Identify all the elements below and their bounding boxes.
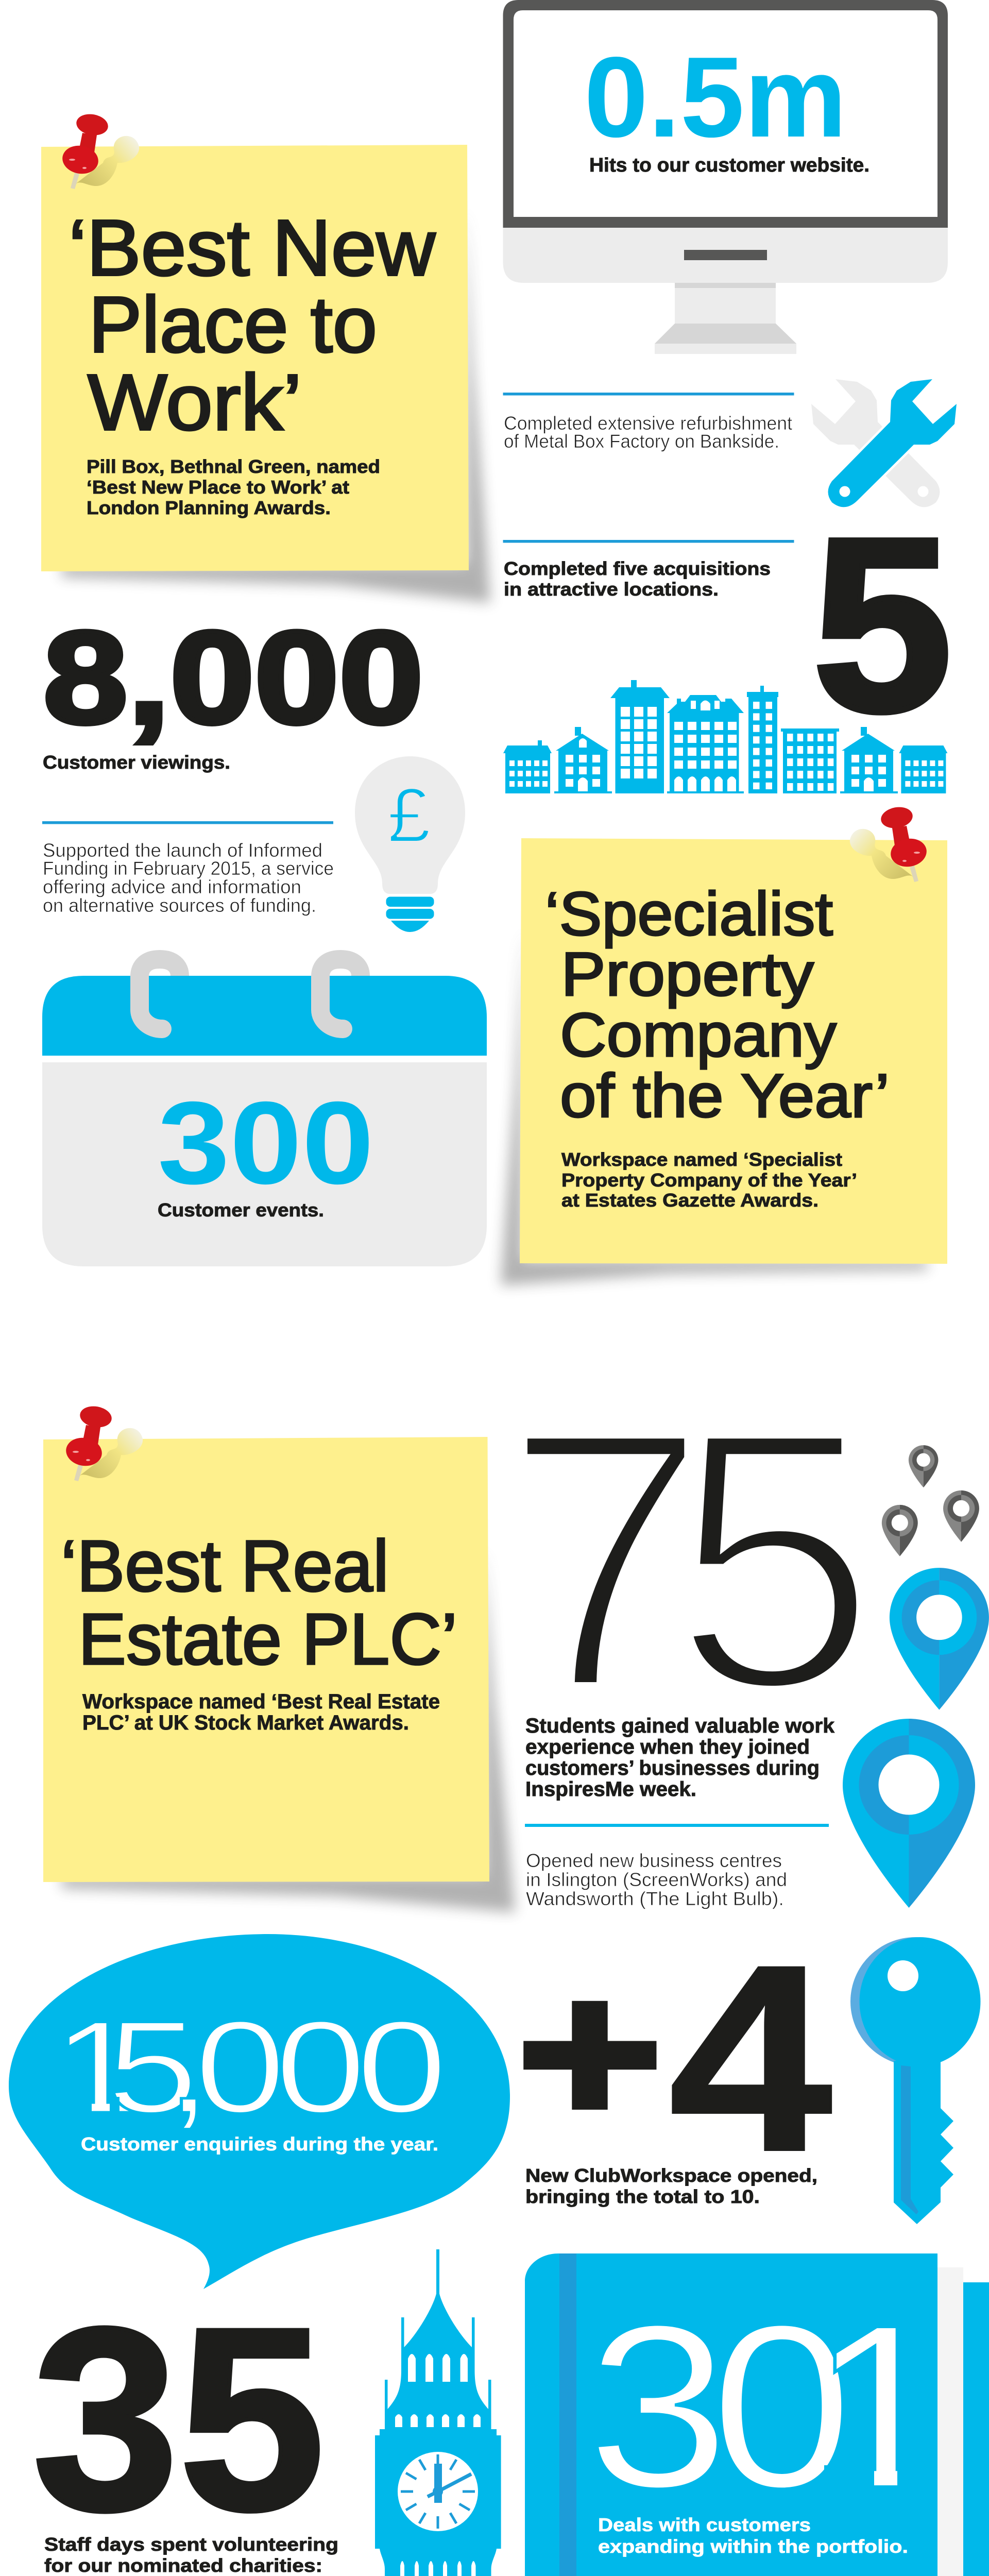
small grey pin left <box>882 1505 918 1556</box>
description: students: experience when they joined <box>525 1736 810 1758</box>
description: students: Students gained valuable work <box>525 1715 835 1737</box>
icon: Big Ben clock tower <box>375 2249 501 2576</box>
description: ClubWorkspace: New ClubWorkspace opened, <box>525 2165 817 2186</box>
label: customer events: Customer events. <box>158 1199 324 1221</box>
text block: acquisitions: in attractive locations. <box>504 579 719 600</box>
panel: sticky note Best Real Estate PLC <box>43 1404 515 1912</box>
monitor stand <box>655 283 796 354</box>
award description: Workspace named ‘Specialist <box>561 1149 842 1170</box>
small grey pin top <box>909 1445 938 1487</box>
building 1 <box>503 740 552 793</box>
stat: +4 ClubWorkspace: + <box>517 1940 662 2165</box>
award description: ‘Best New Place to Work’ at <box>87 477 349 498</box>
calendar body <box>42 1062 487 1266</box>
stat: 8,000 customer viewings: 8,000 <box>43 604 423 751</box>
stat: 35 staff days: 35 <box>32 2274 325 2565</box>
stat: 15,000: 15,000 <box>52 1994 448 2141</box>
icon: crossed wrenches <box>811 379 957 507</box>
icon: key <box>850 1937 981 2224</box>
text block: refurbishment: Completed extensive refurbishment <box>504 413 793 434</box>
heading: Company <box>560 1001 837 1070</box>
description: staff days <box>44 2534 338 2576</box>
description: students: InspiresMe week. <box>525 1778 696 1801</box>
text block: refurbishment <box>503 393 794 452</box>
heading: Work’ <box>88 358 302 447</box>
stat: 0.5m: 0.5m <box>584 33 847 161</box>
award description: Property Company of the Year’ <box>561 1170 857 1191</box>
medium blue pin <box>890 1568 989 1710</box>
sticky note paper <box>41 145 469 571</box>
book spine band <box>559 2253 576 2576</box>
label: deals: Deals with customers <box>598 2514 811 2535</box>
panel: sticky note Best New Place to Work <box>41 112 490 603</box>
award description: Workspace named ‘Best Real Estate <box>82 1690 440 1713</box>
description: students: customers’ businesses during <box>525 1757 820 1780</box>
stat: 75 students: 75 <box>502 1352 878 1768</box>
label: hits: Hits to our customer website. <box>589 155 869 176</box>
panel: speech bubble 15,000 enquiries <box>9 1934 510 2289</box>
calendar ring right <box>320 959 361 1038</box>
award description <box>87 456 380 518</box>
description: ClubWorkspace: bringing the total to 10. <box>525 2186 760 2207</box>
award description: London Planning Awards. <box>87 497 331 518</box>
monitor chin <box>503 222 948 283</box>
clock face <box>398 2452 478 2531</box>
belfry windows <box>395 2354 481 2427</box>
text block: Informed Funding: offering advice and information <box>43 876 301 897</box>
text block: acquisitions: Completed five acquisitions <box>504 558 771 579</box>
label: customer enquiries: Customer enquiries during the year. <box>81 2133 438 2155</box>
building 6 <box>781 728 839 793</box>
label: customer viewings: Customer viewings. <box>43 752 230 773</box>
stat: +4 ClubWorkspace <box>517 1910 834 2207</box>
description: students <box>525 1715 835 1801</box>
award description: PLC’ at UK Stock Market Awards. <box>82 1711 409 1734</box>
description: ClubWorkspace <box>525 2165 817 2207</box>
heading <box>545 879 890 1130</box>
award description <box>561 1149 857 1211</box>
sticky note paper <box>520 838 947 1264</box>
award description: at Estates Gazette Awards. <box>561 1190 819 1211</box>
illustration: row of buildings <box>503 680 947 793</box>
stat: 301: 301 <box>587 2276 953 2536</box>
building 5 <box>747 686 778 793</box>
text block: Informed Funding: Supported the launch of Informed <box>43 840 322 861</box>
sticky note paper <box>43 1437 489 1882</box>
icon: red push pin <box>850 805 929 882</box>
panel: sticky note Specialist Property Company of the Year <box>501 805 947 1285</box>
text block: Informed Funding: on alternative sources of funding. <box>43 895 316 916</box>
description: staff days: Staff days spent volunteering <box>44 2534 338 2555</box>
heading <box>61 1525 457 1680</box>
heading: Place to <box>89 280 377 369</box>
large blue pin <box>843 1719 975 1908</box>
heading: ‘Specialist <box>545 879 833 948</box>
text block: new business centres: in Islington (ScreenWorks) and <box>526 1869 787 1890</box>
text block: acquisitions <box>503 540 794 600</box>
panel: calendar 300 customer events <box>42 959 487 1266</box>
text block: Informed Funding: Funding in February 2015, a service <box>43 858 334 879</box>
pound sign: £ <box>387 772 431 858</box>
stat: 5: 5 <box>813 487 952 762</box>
book pages <box>534 2267 963 2576</box>
label: deals: expanding within the portfolio. <box>598 2536 908 2557</box>
heading: of the Year’ <box>560 1061 890 1130</box>
heading: ‘Best New <box>69 204 436 292</box>
text block: refurbishment: of Metal Box Factory on Bankside. <box>504 431 779 452</box>
stat: 300: 300 <box>158 1078 374 1209</box>
building 8 <box>899 745 947 793</box>
building 2 <box>554 727 612 793</box>
icon: light bulb with pound sign <box>355 756 465 932</box>
monitor screen <box>503 0 948 228</box>
panel: book 301 deals <box>525 2253 989 2576</box>
panel: monitor 0.5m website hits <box>503 0 948 354</box>
description: staff days: for our nominated charities: <box>44 2555 322 2576</box>
text block: Informed Funding <box>42 821 334 916</box>
numeral 4: 4 <box>669 1910 834 2207</box>
label: deals <box>598 2514 908 2557</box>
heading: ‘Best Real <box>61 1525 389 1606</box>
calendar top band <box>42 976 487 1056</box>
icon: red push pin <box>60 112 139 189</box>
text block: new business centres: Opened new business centres <box>526 1850 782 1871</box>
calendar ring left <box>140 959 180 1038</box>
icon: map pins <box>843 1445 989 1908</box>
heading: Property <box>561 940 814 1009</box>
award description <box>82 1690 440 1734</box>
building 4 <box>667 695 744 793</box>
book back cover <box>525 2253 989 2576</box>
award description: Pill Box, Bethnal Green, named <box>87 456 380 477</box>
building 3 <box>610 680 670 793</box>
icon: red push pin <box>64 1404 143 1481</box>
building 7 <box>840 727 898 793</box>
text block: new business centres: Wandsworth (The Light Bulb). <box>526 1888 784 1909</box>
small grey pin right <box>943 1490 979 1542</box>
text block: new business centres <box>525 1824 829 1909</box>
tower windows <box>400 2561 476 2576</box>
heading <box>69 204 436 447</box>
heading: Estate PLC’ <box>78 1598 457 1680</box>
